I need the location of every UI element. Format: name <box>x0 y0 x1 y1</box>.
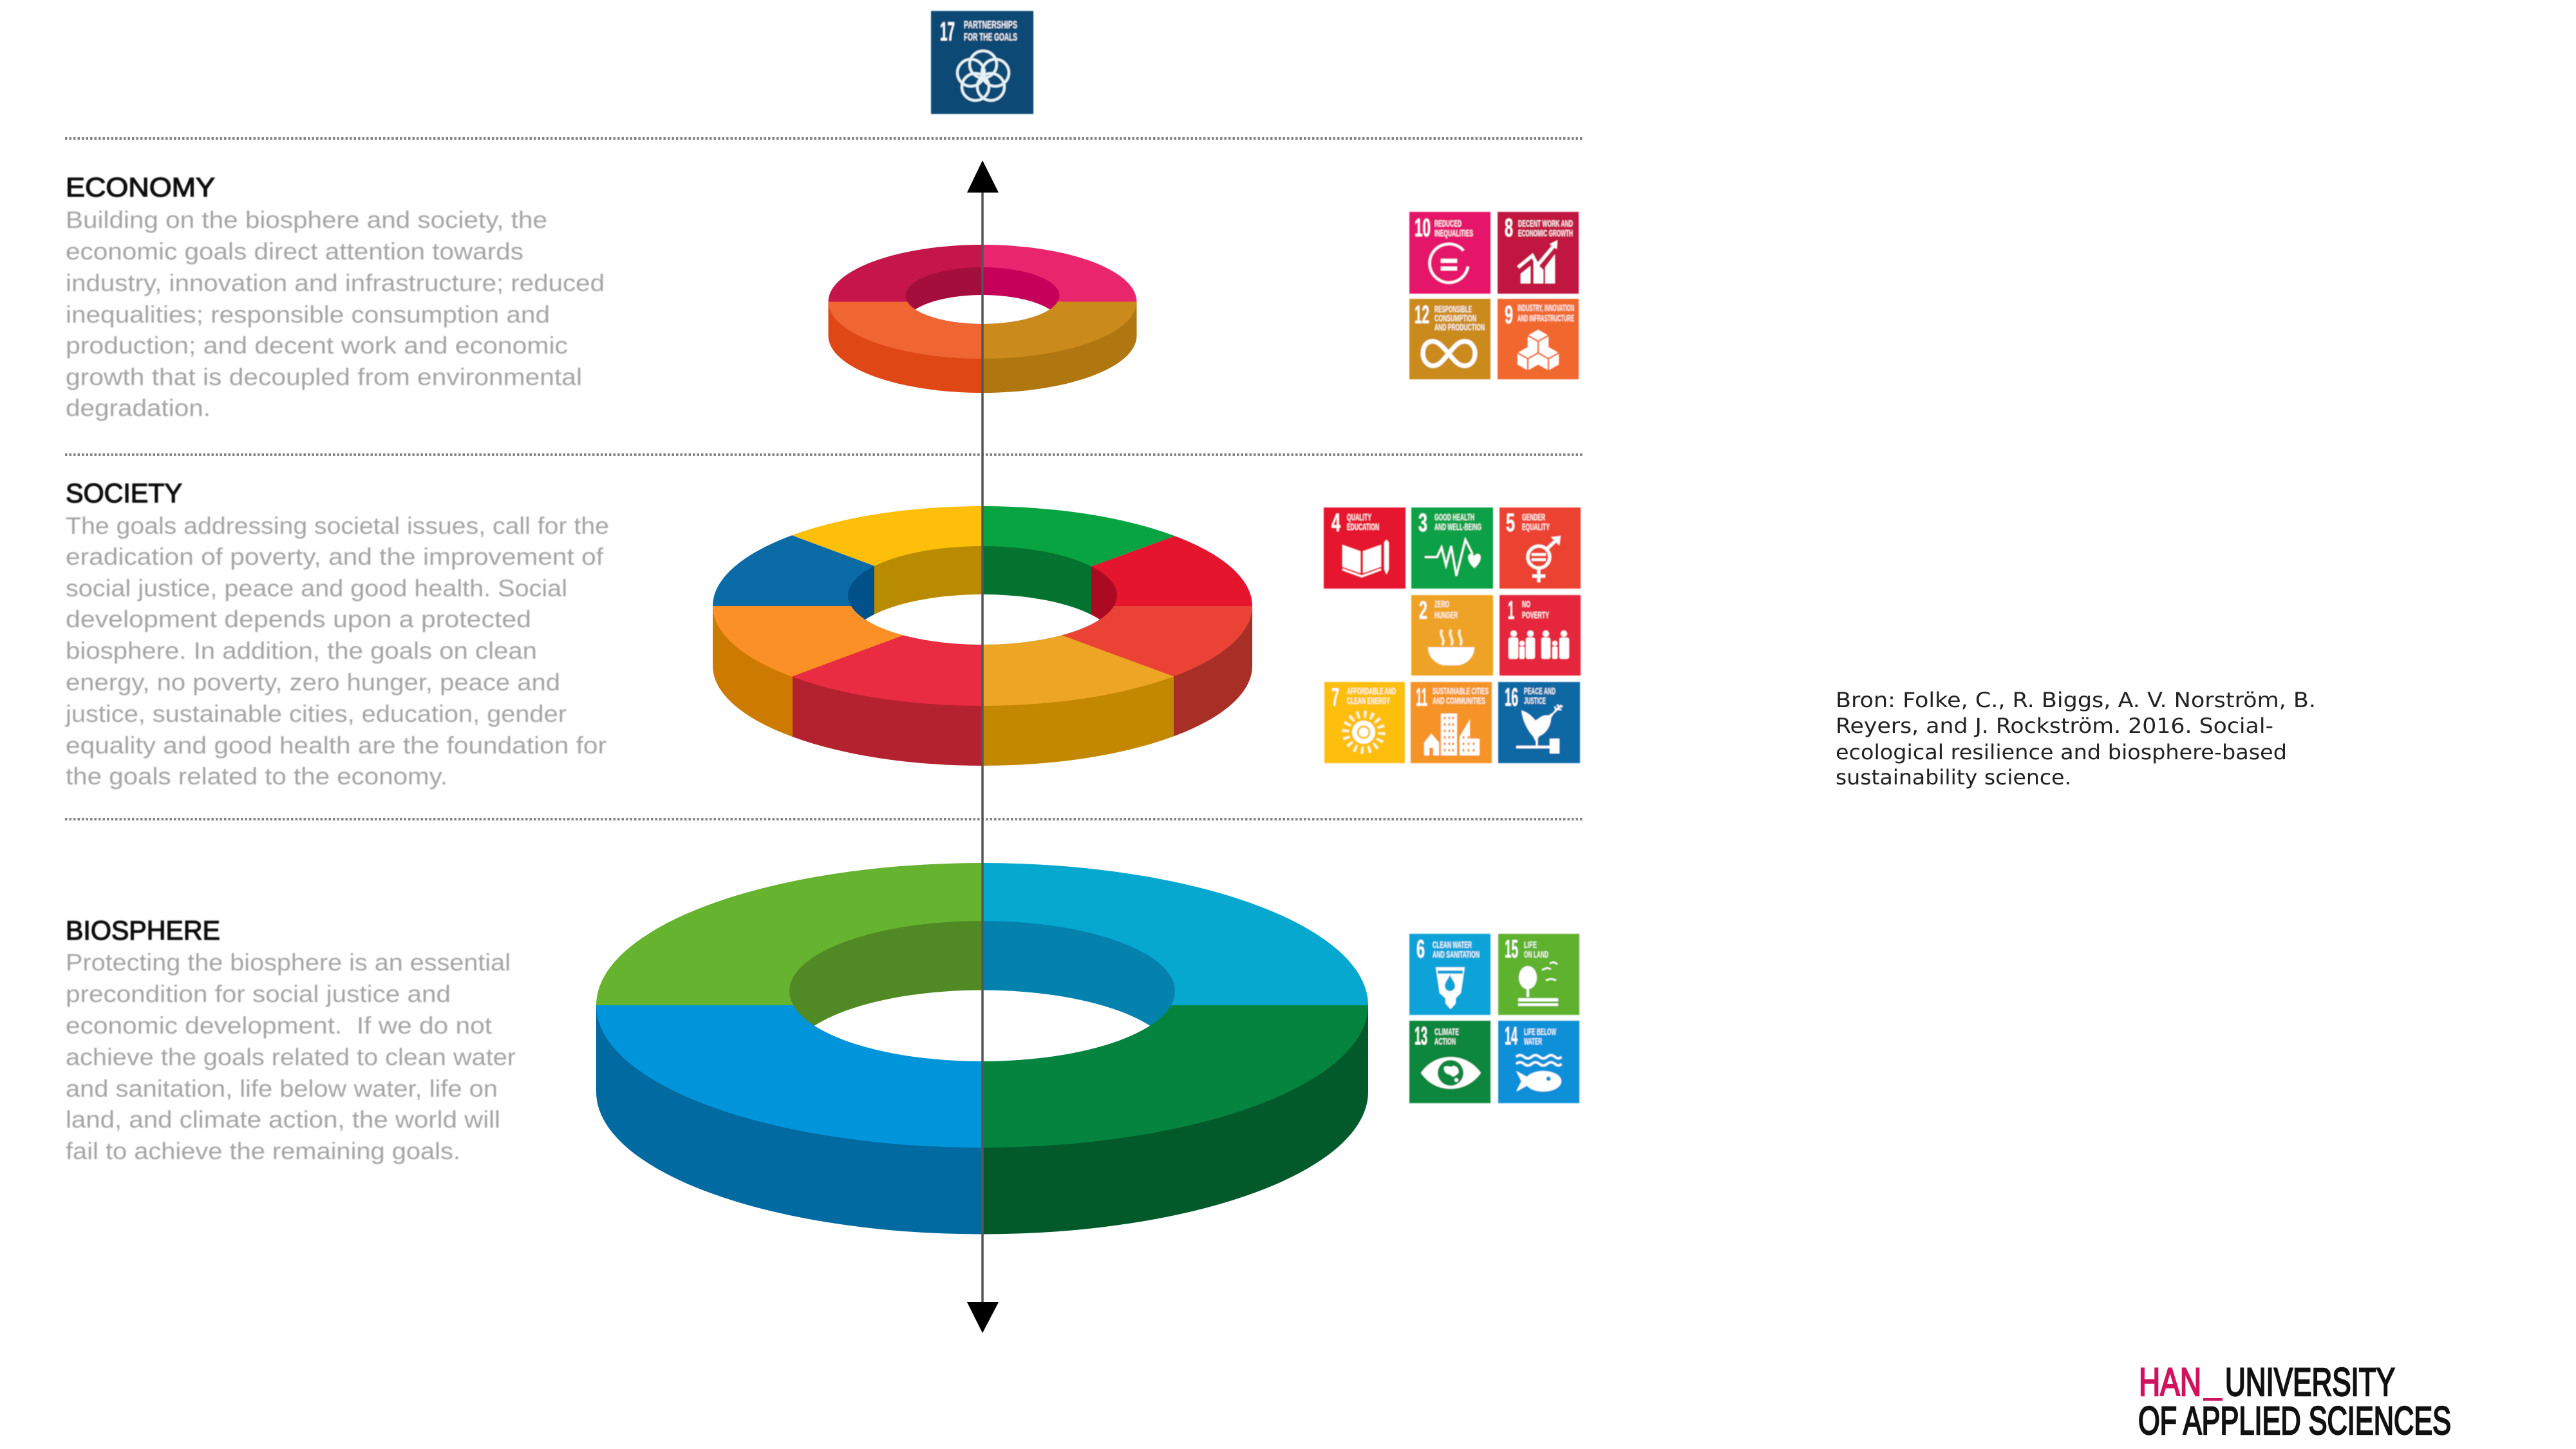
tile: goal 5: EQUALITY <box>1522 522 1550 533</box>
tile: goal 1 <box>1500 595 1581 676</box>
tile: goal 11: 11 <box>1416 683 1427 712</box>
tile: goal 13: ACTION <box>1434 1036 1456 1047</box>
society description: energy, no poverty, zero hunger, peace and <box>66 669 560 696</box>
tile: goal 12 <box>1409 299 1490 379</box>
tile: goal 9: AND INFRASTRUCTURE <box>1518 313 1574 324</box>
tile: goal 5: 5 <box>1506 509 1515 537</box>
heading: economy: ECONOMY <box>66 172 215 202</box>
tile: goal 7: 7 <box>1331 683 1339 712</box>
tile: goal 11 <box>1411 682 1492 763</box>
economy description: production; and decent work and economic <box>66 332 568 359</box>
society description: equality and good health are the foundation for <box>66 732 606 759</box>
society description: development depends upon a protected <box>66 606 531 632</box>
axis arrow <box>967 160 999 1333</box>
society description <box>65 513 609 790</box>
tile: goal 9: 9 <box>1505 301 1513 329</box>
tile: goal 6 <box>1409 934 1490 1015</box>
biosphere description: precondition for social justice and <box>66 981 451 1007</box>
tile: goal 4: QUALITY <box>1347 512 1371 523</box>
tile: goal 16: PEACE AND <box>1524 686 1556 697</box>
tile: goal 5: GENDER <box>1522 512 1545 523</box>
tile: goal 13 <box>1409 1021 1490 1103</box>
biosphere description: Protecting the biosphere is an essential <box>66 949 511 976</box>
tile: goal 12: RESPONSIBLE <box>1434 304 1472 315</box>
tile: goal 1: POVERTY <box>1522 610 1549 621</box>
tile: goal 17: PARTNERSHIPS <box>964 19 1017 31</box>
tile: goal 10: REDUCED <box>1434 218 1462 229</box>
tile: goal 6: CLEAN WATER <box>1433 940 1472 951</box>
tile: goal 9: INDUSTRY, INNOVATION <box>1518 303 1574 314</box>
tile: goal 17 <box>931 11 1033 114</box>
tile: goal 11: AND COMMUNITIES <box>1433 696 1485 706</box>
society description: social justice, peace and good health. Social <box>66 575 567 601</box>
tile: goal 14: LIFE BELOW <box>1524 1027 1556 1037</box>
tile: goal 7: AFFORDABLE AND <box>1347 686 1396 697</box>
tile: goal 15 <box>1498 934 1579 1015</box>
society ring <box>713 506 1252 766</box>
tile: goal 1: NO <box>1522 599 1530 610</box>
tile: goal 4: EDUCATION <box>1347 522 1379 533</box>
society goal tiles <box>1324 507 1581 763</box>
tile: goal 10: INEQUALITIES <box>1434 228 1473 239</box>
tile: goal 7: CLEAN ENERGY <box>1347 696 1390 706</box>
tile: goal 14: 14 <box>1505 1022 1518 1050</box>
tile: goal 14: WATER <box>1524 1036 1542 1047</box>
tile: goal 2: HUNGER <box>1434 610 1458 621</box>
tile: goal 1: 1 <box>1508 596 1514 625</box>
tile: goal 5 <box>1500 507 1581 589</box>
tile: goal 6: AND SANITATION <box>1433 949 1480 960</box>
tile: goal 2 <box>1411 595 1493 676</box>
tile: goal 8: 8 <box>1505 214 1513 242</box>
tile: goal 8 <box>1498 212 1579 294</box>
economy description: Building on the biosphere and society, the <box>66 207 547 233</box>
tile: goal 8: DECENT WORK AND <box>1518 218 1573 229</box>
tile: goal 12: AND PRODUCTION <box>1434 322 1485 333</box>
society description: the goals related to the economy. <box>66 763 447 790</box>
source citation: Reyers, and J. Rockström. 2016. Social- <box>1836 714 2273 738</box>
logo: HAN University of Applied Sciences: HAN <box>2139 1360 2201 1404</box>
tile: goal 2: 2 <box>1419 596 1427 625</box>
tile: goal 16: JUSTICE <box>1524 696 1546 706</box>
tile: goal 6: 6 <box>1416 935 1425 963</box>
society description: biosphere. In addition, the goals on clean <box>66 638 537 664</box>
heading: society: SOCIETY <box>66 478 182 508</box>
society text block <box>65 478 609 790</box>
tile: goal 11: SUSTAINABLE CITIES <box>1433 686 1489 697</box>
tile: goal 3: 3 <box>1418 509 1427 537</box>
economy description: growth that is decoupled from environmental <box>66 364 582 390</box>
tile: goal 3: AND WELL-BEING <box>1434 522 1481 533</box>
tile: goal 3 <box>1411 507 1493 589</box>
logo: HAN University of Applied Sciences <box>2138 1360 2451 1443</box>
tile: goal 8: ECONOMIC GROWTH <box>1518 228 1573 239</box>
tile: goal 13: 13 <box>1415 1022 1427 1050</box>
economy description <box>66 207 605 421</box>
biosphere ring <box>596 863 1368 1234</box>
tile: goal 10 <box>1409 212 1490 294</box>
tile: goal 14 <box>1498 1021 1579 1103</box>
heading: biosphere: BIOSPHERE <box>66 915 220 945</box>
biosphere description: fail to achieve the remaining goals. <box>66 1138 460 1164</box>
tile: goal 10: 10 <box>1415 214 1431 242</box>
economy text block <box>66 172 605 421</box>
tile: goal 7 <box>1324 682 1405 763</box>
tile: goal 4: 4 <box>1331 509 1340 537</box>
society description: eradication of poverty, and the improvement of <box>66 544 604 570</box>
logo: HAN University of Applied Sciences: UNIVERSITY <box>2225 1360 2395 1404</box>
tile: goal 13: CLIMATE <box>1434 1027 1459 1037</box>
economy description: degradation. <box>66 395 211 421</box>
economy goal tiles <box>1409 212 1579 379</box>
tile: goal 17: FOR THE GOALS <box>964 31 1017 43</box>
source citation <box>1836 688 2316 790</box>
society description: The goals addressing societal issues, call for the <box>66 513 609 539</box>
tile: goal 2: ZERO <box>1434 599 1449 610</box>
tile: goal 17: 17 <box>940 16 955 46</box>
economy ring <box>828 245 1137 393</box>
source citation: Bron: Folke, C., R. Biggs, A. V. Norström, B. <box>1836 688 2316 712</box>
tile: goal 15: 15 <box>1505 935 1518 963</box>
society description: justice, sustainable cities, education, gender <box>65 701 567 727</box>
tile: goal 15: LIFE <box>1524 940 1537 951</box>
source citation: ecological resilience and biosphere-based <box>1836 740 2287 764</box>
tile: goal 12: CONSUMPTION <box>1434 313 1476 324</box>
biosphere goal tiles <box>1409 934 1579 1103</box>
tile: goal 16: 16 <box>1505 683 1518 712</box>
tile: goal 9 <box>1498 299 1579 379</box>
biosphere description: land, and climate action, the world will <box>66 1106 500 1133</box>
tile: goal 16 <box>1498 682 1580 763</box>
tile: goal 12: 12 <box>1415 301 1429 329</box>
biosphere description: economic development. If we do not <box>66 1012 493 1039</box>
tile: goal 15: ON LAND <box>1524 949 1548 960</box>
biosphere text block <box>66 915 516 1164</box>
biosphere description <box>66 949 516 1164</box>
economy description: inequalities; responsible consumption and <box>66 301 550 328</box>
logo: HAN University of Applied Sciences: OF APPLIED SCIENCES <box>2138 1399 2451 1443</box>
tile: goal 4 <box>1324 507 1406 589</box>
source citation: sustainability science. <box>1836 765 2071 790</box>
biosphere description: achieve the goals related to clean water <box>66 1044 516 1070</box>
tile: goal 3: GOOD HEALTH <box>1434 512 1474 523</box>
biosphere description: and sanitation, life below water, life on <box>66 1075 498 1102</box>
economy description: industry, innovation and infrastructure; reduced <box>66 270 605 296</box>
economy description: economic goals direct attention towards <box>66 238 523 265</box>
